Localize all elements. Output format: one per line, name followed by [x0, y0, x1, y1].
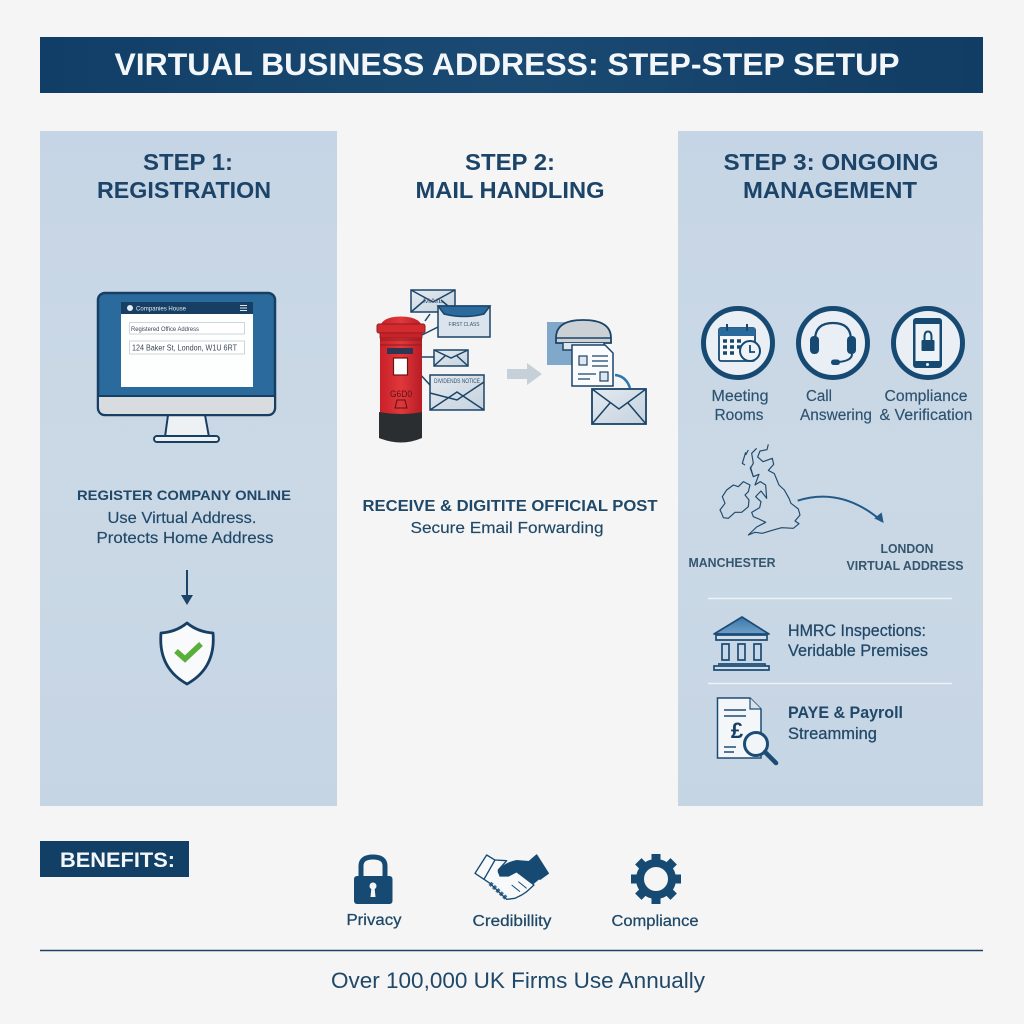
text: register company online: Use Virtual Address.: [108, 510, 256, 527]
label: credibility: Credibillity: [472, 913, 552, 930]
text: meeting rooms: Rooms: [714, 407, 764, 424]
label: privacy: Privacy: [346, 912, 402, 929]
envelope: top small: MAIL: [423, 299, 444, 305]
text: register company online: [77, 487, 291, 547]
text: meeting rooms: Meeting: [712, 388, 768, 405]
icon: desktop monitor with company form: [98, 293, 275, 442]
icon: envelopes entering post box: [411, 290, 490, 410]
panel: step 3 ongoing management: [678, 131, 983, 806]
text: receive and digitise post: RECEIVE & DIGITITE OFFICIAL POST: [362, 498, 658, 515]
envelope: large: DIVIDENDS NOTICE: [434, 379, 480, 385]
icon: red post box: G6D0: [390, 389, 412, 399]
label: London virtual address: [846, 542, 964, 573]
text: register company online: Protects Home Address: [96, 530, 274, 547]
map: UK outline with arrow to London: [720, 444, 884, 535]
panel: step 1 registration: [40, 131, 337, 806]
icon: call answering headset: [798, 308, 868, 378]
text: call answering: [800, 388, 872, 424]
text: PAYE and payroll: PAYE & Payroll: [788, 704, 903, 722]
text: HMRC inspections: HMRC Inspections:: [788, 622, 926, 640]
benefits label: [40, 841, 189, 877]
envelope: blue flap: FIRST CLASS: [448, 322, 480, 328]
text: register company online: REGISTER COMPANY ONLINE: [77, 487, 291, 503]
heading: step 3: MANAGEMENT: [743, 177, 917, 203]
icon: desktop monitor with company form: Companies House: [136, 306, 186, 312]
label: compliance: Compliance: [612, 913, 698, 930]
text: receive and digitise post: [362, 498, 658, 537]
heading: step 2: MAIL HANDLING: [416, 177, 604, 203]
text: HMRC inspections: [788, 622, 928, 660]
icon: credibility handshake: [475, 855, 548, 899]
text: call answering: Call: [806, 388, 832, 405]
icon: desktop monitor with company form: 124 Baker St, London, W1U 6RT: [132, 344, 237, 352]
icon: compliance gear: [631, 854, 681, 904]
icon: scanner digitising document: [547, 320, 646, 424]
envelope: middle small: [434, 350, 468, 366]
heading: step 1: STEP 1:: [143, 149, 233, 175]
panel: step 2 mail handling: [362, 149, 658, 537]
icon: shield with green check: [161, 623, 213, 684]
text: compliance and verification: [880, 388, 972, 424]
text: HMRC inspections: Veridable Premises: [788, 642, 928, 660]
heading: step 1: REGISTRATION: [97, 177, 271, 203]
icon: payroll document with magnifier: £: [731, 718, 744, 743]
text: compliance and verification: Compliance: [884, 388, 968, 405]
heading: step 2: STEP 2:: [465, 149, 555, 175]
text: receive and digitise post: Secure Email Forwarding: [410, 520, 604, 537]
icon: meeting rooms calendar: [704, 308, 772, 378]
arrow: down to shield: [181, 570, 193, 605]
heading: step 1: [97, 149, 271, 203]
heading: step 3: [724, 149, 938, 203]
text: call answering: Answering: [800, 407, 872, 424]
text: PAYE and payroll: [788, 704, 903, 743]
heading: step 3: STEP 3: ONGOING: [724, 149, 938, 175]
icon: desktop monitor with company form: Registered Office Address: [131, 326, 200, 333]
arrow: grey process arrow: [507, 363, 542, 385]
title banner: VIRTUAL BUSINESS ADDRESS: STEP-STEP SETUP: [114, 46, 900, 82]
benefits label: BENEFITS:: [60, 849, 175, 872]
label: London virtual address: VIRTUAL ADDRESS: [846, 559, 964, 573]
icon: compliance smartphone lock: [894, 308, 962, 378]
title banner: [40, 37, 983, 93]
heading: step 2: [416, 149, 604, 203]
icon: privacy padlock: [354, 857, 392, 904]
icon: payroll document with magnifier: [718, 698, 776, 763]
text: meeting rooms: [712, 388, 768, 424]
icon: red post box: [377, 316, 425, 442]
label: Manchester: MANCHESTER: [688, 556, 776, 570]
label: London virtual address: LONDON: [880, 542, 934, 556]
text: PAYE and payroll: Streamming: [788, 725, 877, 743]
icon: bank building: [714, 617, 769, 670]
text: compliance and verification: & Verification: [880, 407, 972, 424]
footer statistic: Over 100,000 UK Firms Use Annually: [331, 968, 705, 993]
